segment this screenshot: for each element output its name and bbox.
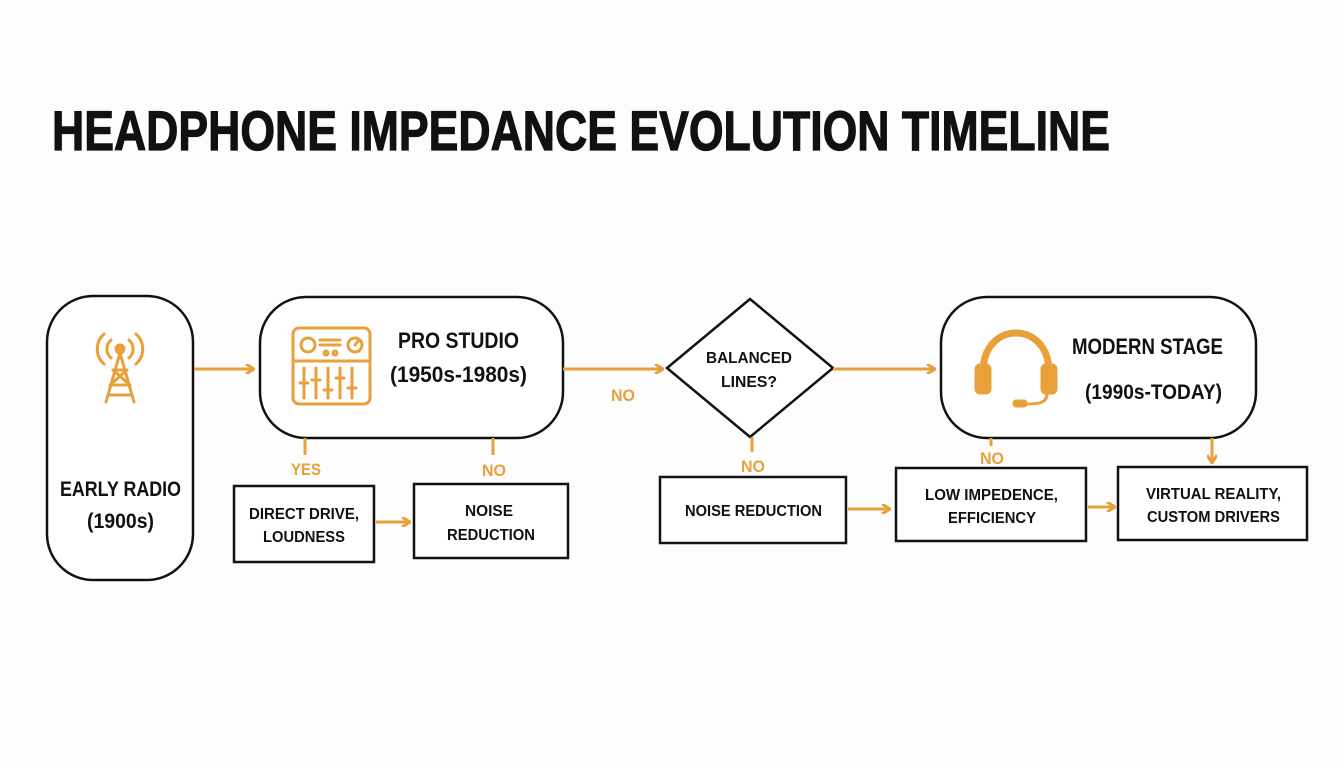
arrow: studio to decision [563, 369, 662, 405]
label: yes branch [291, 438, 321, 479]
box: low impedence: EFFICIENCY [948, 510, 1036, 527]
decision: balanced lines: LINES? [721, 374, 777, 391]
panel: early radio [47, 296, 193, 580]
decision: balanced lines [667, 299, 833, 437]
box: virtual reality: VIRTUAL REALITY, [1146, 486, 1281, 503]
label: yes branch: YES [291, 460, 321, 479]
icon: headset [975, 333, 1057, 407]
panel: pro studio: (1950s-1980s) [390, 362, 527, 387]
icon: radio tower [97, 334, 143, 402]
title: HEADPHONE IMPEDANCE EVOLUTION TIMELINE [52, 99, 1110, 162]
box: virtual reality: CUSTOM DRIVERS [1147, 509, 1280, 526]
panel: modern stage: (1990s-TODAY) [1085, 381, 1222, 404]
panel: modern stage: MODERN STAGE [1072, 334, 1223, 359]
box: virtual reality [1118, 467, 1307, 540]
box: noise reduction 2 [660, 477, 846, 543]
panel: pro studio [260, 297, 563, 438]
arrow: radio to studio [194, 368, 253, 370]
icon: mixer [293, 328, 370, 404]
label: decision no [741, 437, 765, 476]
arrow: noise to low impedance [848, 508, 889, 510]
box: direct drive [234, 486, 374, 562]
box: low impedence [896, 468, 1086, 541]
arrow: studio to decision: NO [611, 386, 635, 405]
box: direct drive: LOUDNESS [263, 529, 345, 546]
label: modern no [980, 438, 1004, 468]
decision: balanced lines: BALANCED [706, 350, 792, 367]
label: no branch: NO [482, 461, 506, 480]
arrow: decision to modern [833, 368, 934, 370]
panel: early radio: (1900s) [87, 510, 154, 533]
label: no branch [482, 438, 506, 480]
box: noise reduction 1 [414, 484, 568, 558]
panel: early radio: EARLY RADIO [60, 478, 181, 501]
box: low impedence: LOW IMPEDENCE, [925, 487, 1058, 504]
arrow: modern down [1210, 438, 1214, 462]
arrow: direct to noise [376, 520, 409, 524]
label: modern no: NO [980, 449, 1004, 468]
box: direct drive: DIRECT DRIVE, [249, 506, 359, 523]
box: noise reduction 1: NOISE [465, 503, 513, 520]
box: noise reduction 1: REDUCTION [447, 527, 535, 544]
panel: modern stage [941, 297, 1256, 438]
box: noise reduction 2: NOISE REDUCTION [685, 503, 822, 520]
panel: pro studio: PRO STUDIO [398, 328, 519, 353]
label: decision no: NO [741, 457, 765, 476]
arrow: low to vr [1088, 506, 1114, 508]
